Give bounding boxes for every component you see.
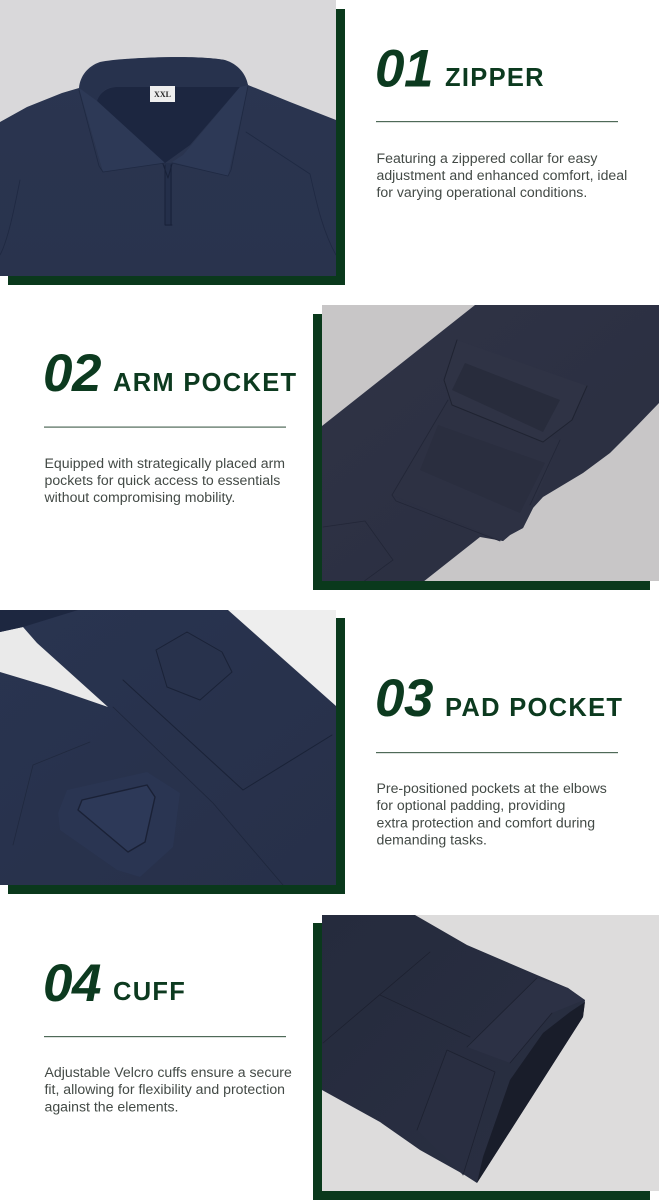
- heading: 04 cuff: [43, 954, 186, 1013]
- text block: cuff description: against the elements.: [44, 1098, 178, 1114]
- photo: arm pocket: [322, 305, 659, 582]
- text block: pad pocket description: extra protection and comfort during: [376, 814, 595, 830]
- text block: pad pocket description: demanding tasks.: [376, 832, 487, 848]
- heading: 03 pad pocket: [375, 669, 623, 728]
- text block: zipper description: Featuring a zippered collar for easy: [376, 150, 598, 166]
- green frame: zipper photo: [8, 9, 345, 285]
- panel: pad pocket photo with green frame: [0, 610, 345, 894]
- green frame: arm pocket photo: [313, 314, 650, 590]
- text block: arm pocket description: Equipped with strategically placed arm: [44, 455, 285, 471]
- green frame: pad pocket photo: [8, 618, 345, 894]
- panel: zipper photo with green frame: [0, 0, 345, 285]
- text block: arm pocket description: without compromising mobility.: [44, 489, 235, 505]
- text block: zipper description: for varying operational conditions.: [376, 184, 587, 200]
- heading: 02 arm pocket: 02: [43, 344, 101, 403]
- text block: cuff description: [44, 1064, 292, 1114]
- photo: zipper collar: [0, 0, 336, 276]
- heading: 01 zipper: [375, 40, 545, 98]
- photo: pad pocket: [0, 610, 336, 885]
- heading: 04 cuff: 04: [43, 954, 101, 1013]
- text block: arm pocket description: [44, 455, 285, 505]
- heading: 02 arm pocket: [43, 344, 297, 403]
- photo: cuff: [322, 915, 659, 1191]
- text block: arm pocket description: pockets for quick access to essentials: [44, 472, 280, 488]
- heading: 04 cuff: CUFF: [113, 978, 186, 1006]
- text block: pad pocket description: [376, 780, 607, 848]
- text block: cuff description: fit, allowing for flexibility and protection: [44, 1081, 285, 1097]
- text block: pad pocket description: Pre-positioned pockets at the elbows: [376, 780, 607, 796]
- green frame: cuff photo: [313, 923, 650, 1200]
- heading: 03 pad pocket: 03: [375, 669, 433, 728]
- text block: zipper description: [376, 150, 627, 200]
- heading: 02 arm pocket: ARM POCKET: [113, 369, 297, 397]
- text block: pad pocket description: for optional padding, providing: [376, 797, 565, 813]
- heading: 01 zipper: ZIPPER: [445, 64, 545, 92]
- panel: arm pocket photo with green frame: [313, 305, 659, 590]
- panel: cuff photo with green frame: [313, 915, 659, 1200]
- text block: cuff description: Adjustable Velcro cuffs ensure a secure: [44, 1064, 292, 1080]
- heading: 01 zipper: 01: [375, 40, 433, 98]
- text block: zipper description: adjustment and enhanced comfort, ideal: [376, 167, 627, 183]
- icon: XXL size label: XXL: [154, 90, 171, 99]
- heading: 03 pad pocket: PAD POCKET: [445, 694, 623, 722]
- icon: XXL size label: [150, 86, 175, 102]
